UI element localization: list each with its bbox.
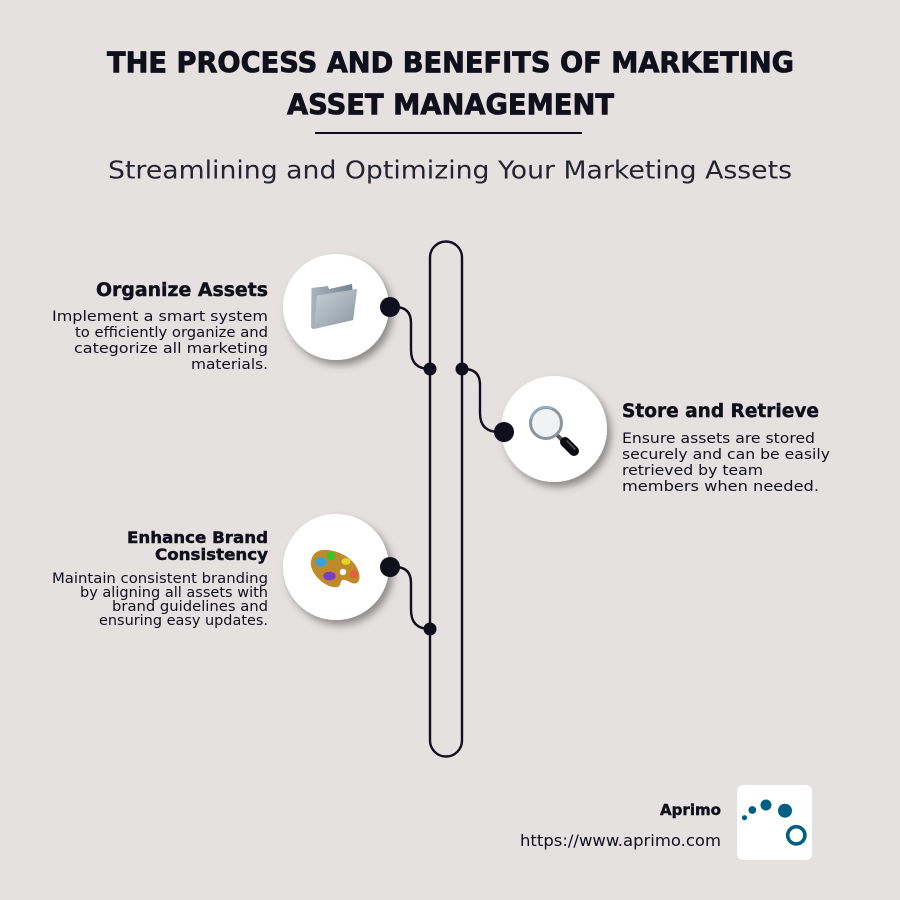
logo (737, 785, 812, 860)
body text (52, 571, 268, 629)
body text: brand guidelines and (112, 599, 268, 615)
heading: Organize Assets (96, 279, 268, 301)
title: THE PROCESS AND BENEFITS OF MARKETING (107, 46, 794, 80)
body text: Implement a smart system (52, 309, 268, 325)
icon: folder (283, 254, 389, 360)
body text: by aligning all assets with (80, 585, 268, 601)
title: ASSET MANAGEMENT (287, 88, 615, 122)
body text: members when needed. (622, 479, 819, 495)
heading: Store and Retrieve (622, 400, 819, 422)
heading: Enhance Brand (127, 528, 268, 547)
body text (52, 309, 268, 373)
connector dot (380, 557, 400, 577)
body text: materials. (191, 357, 268, 373)
footer url: https://www.aprimo.com (520, 831, 721, 850)
heading: Consistency (155, 545, 269, 564)
central timeline pill (430, 242, 462, 756)
icon: magnifying glass (501, 376, 607, 482)
connector: store and retrieve (456, 362, 504, 432)
body text: retrieved by team (622, 463, 763, 479)
body text: securely and can be easily (622, 447, 830, 463)
panel: organize assets (52, 254, 400, 373)
body text: Ensure assets are stored (622, 431, 815, 447)
body text: Maintain consistent branding (52, 571, 268, 587)
title (107, 46, 794, 122)
connector: enhance brand consistency (390, 567, 436, 636)
connector dot (380, 297, 400, 317)
footer brand name: Aprimo (660, 801, 721, 819)
body text: ensuring easy updates. (99, 613, 268, 629)
heading (127, 528, 269, 564)
title underline (315, 132, 582, 134)
panel: enhance brand consistency (52, 514, 400, 629)
connector: organize assets (390, 307, 436, 376)
connector dot (494, 422, 514, 442)
body text: categorize all marketing (74, 341, 268, 357)
panel: store and retrieve (494, 376, 830, 495)
icon: paint palette (283, 514, 389, 620)
body text (622, 431, 830, 495)
body text: to efficiently organize and (75, 325, 268, 341)
subtitle: Streamlining and Optimizing Your Marketing Assets (108, 156, 792, 184)
